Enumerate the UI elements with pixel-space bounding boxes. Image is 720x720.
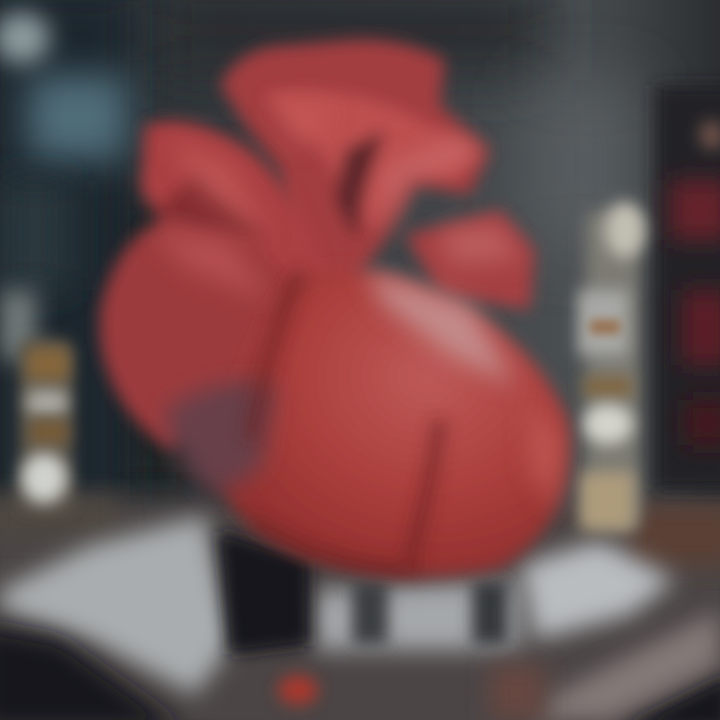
background: blue-grey panel upper left: [0, 0, 130, 510]
bottle, right of heart: [578, 202, 645, 530]
heart: highlights: [150, 105, 562, 510]
anatomical heart: [100, 39, 570, 576]
heart: left vessel lobes: [100, 121, 325, 450]
heart: back vessels top: [220, 39, 535, 310]
shelf with dark red packages, right: [655, 85, 720, 490]
heart stand: [218, 530, 545, 720]
heart: main ventricle body: [215, 269, 570, 576]
bottle, left of heart: [0, 290, 72, 510]
table surface: [0, 495, 720, 720]
heart: shaded lower left vein area: [165, 383, 275, 495]
heart: dark creases: [250, 270, 440, 570]
